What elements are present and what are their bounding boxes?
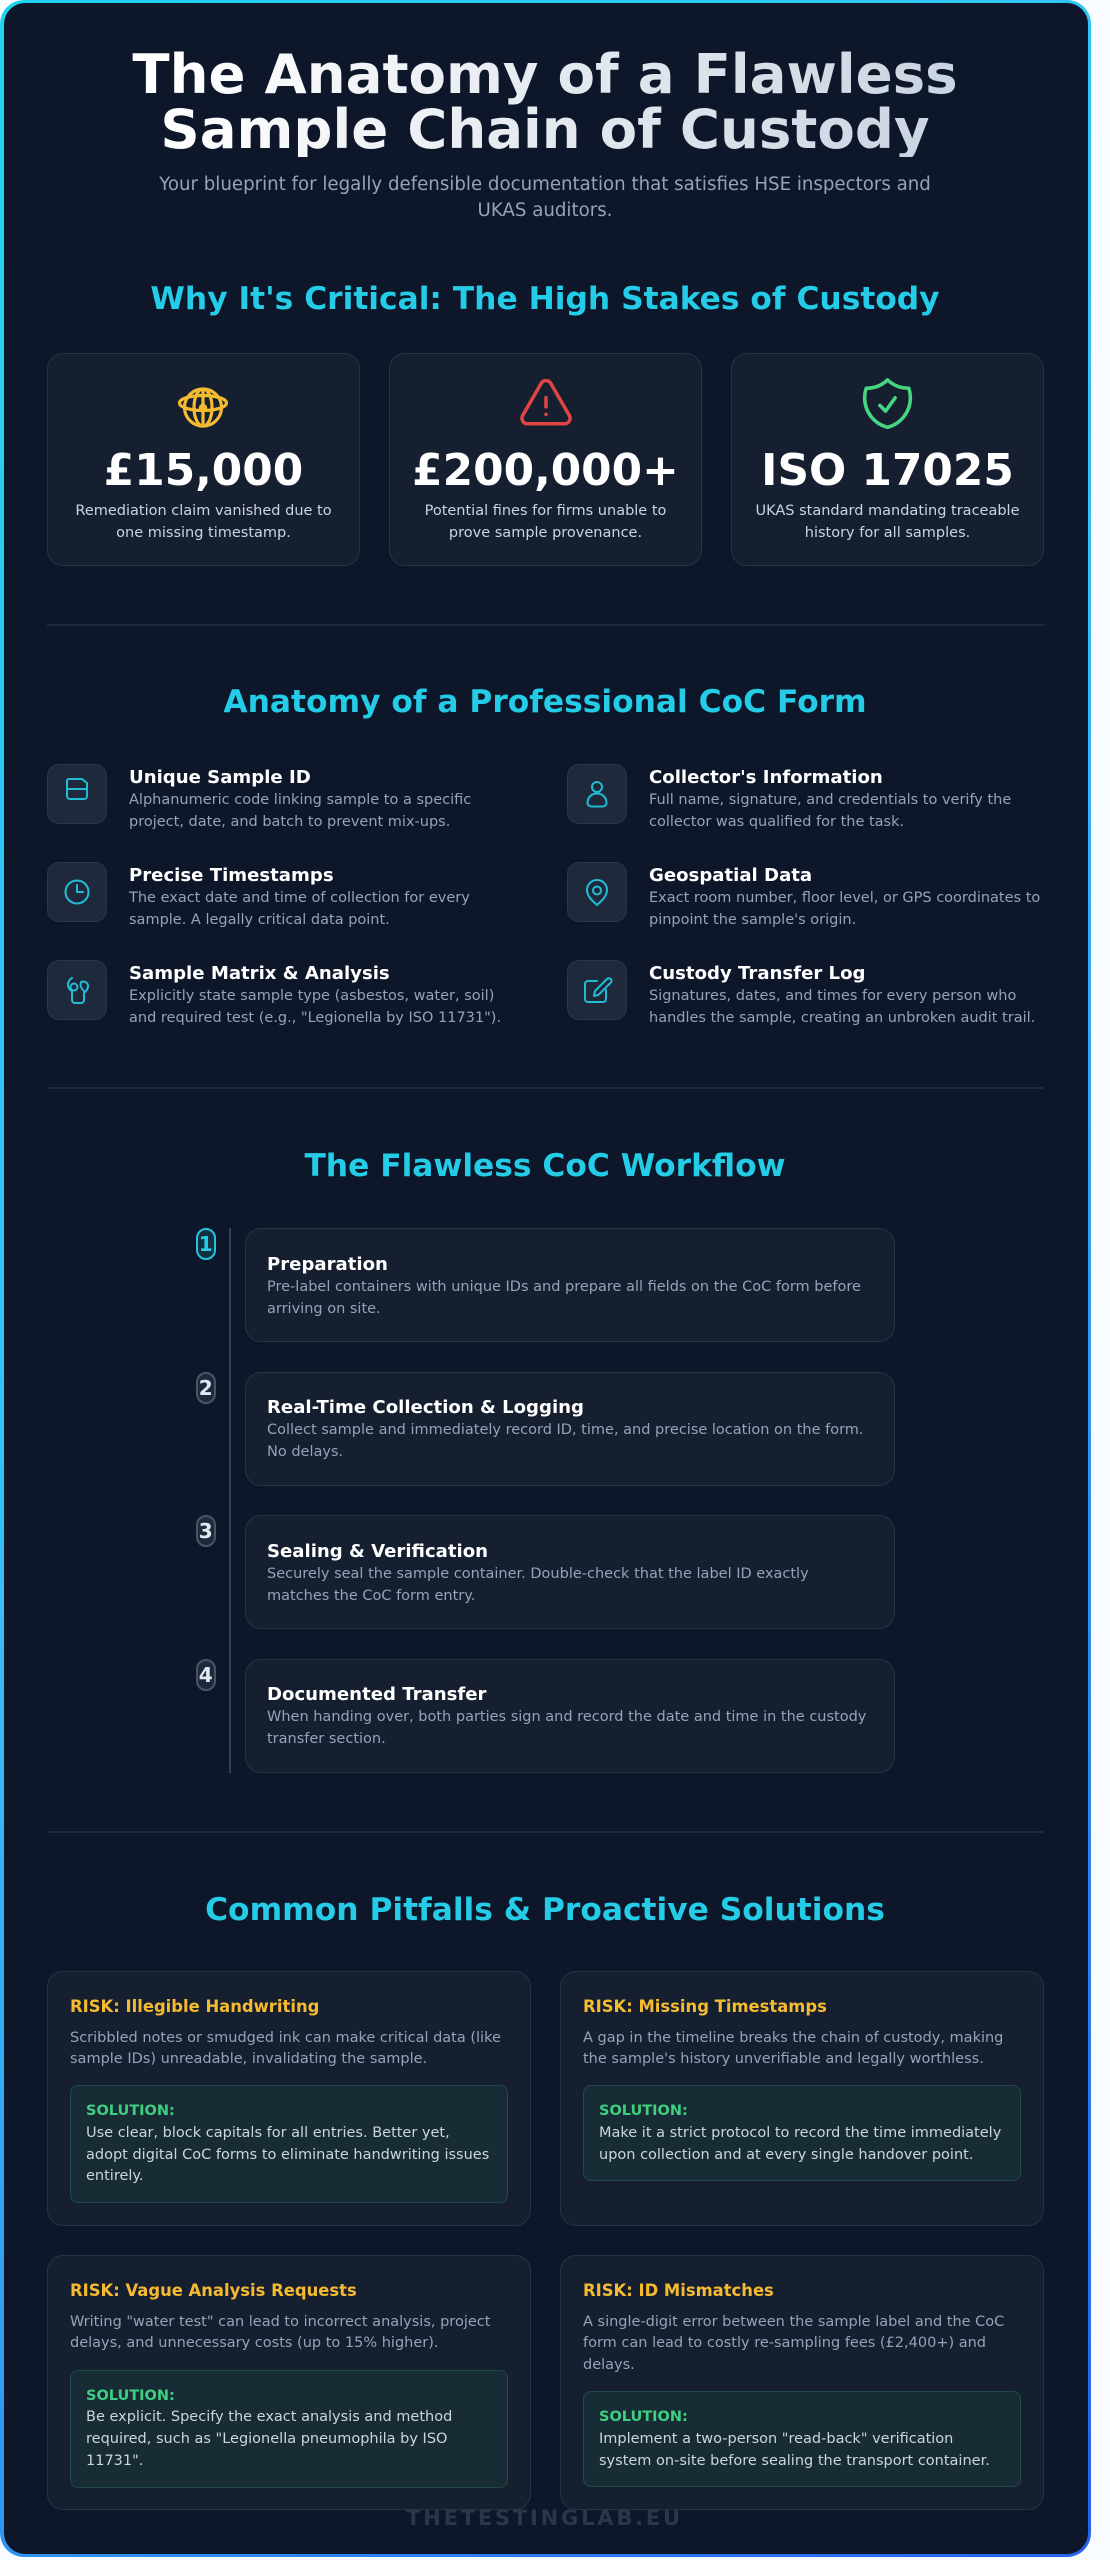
risk title: RISK: Vague Analysis Requests — [70, 2281, 357, 2300]
panel: ID mismatches — [560, 2255, 1044, 2510]
icon: pencil square — [567, 960, 627, 1020]
step description — [267, 1422, 864, 1460]
icon: map pin — [567, 862, 627, 922]
step description: transfer section. — [267, 1731, 386, 1747]
risk description — [583, 2314, 1004, 2373]
solution box — [70, 2085, 508, 2203]
risk title: RISK: ID Mismatches — [583, 2281, 774, 2300]
risk title: RISK: Illegible Handwriting — [70, 1997, 319, 2016]
feature title: Sample Matrix & Analysis — [129, 963, 390, 984]
title — [0, 47, 1090, 157]
feature description: Alphanumeric code linking sample to a specific — [129, 792, 471, 808]
stat description: Remediation claim vanished due to — [75, 502, 332, 518]
risk description: delays. — [583, 2357, 635, 2373]
step badge 3: 3 — [199, 1519, 213, 1543]
step badge 2 — [196, 1372, 216, 1404]
solution box — [583, 2391, 1021, 2487]
panel: missing timestamps — [560, 1971, 1044, 2226]
stat description: UKAS standard mandating traceable — [756, 502, 1020, 518]
risk description — [583, 2030, 1003, 2067]
step description — [267, 1279, 861, 1317]
icon: gold coin globe — [178, 387, 228, 428]
risk description: the sample's history unverifiable and legally worthless. — [583, 2051, 984, 2067]
workflow step 3 — [245, 1515, 895, 1629]
feature title: Geospatial Data — [649, 865, 812, 886]
subtitle — [159, 174, 931, 221]
solution box: 11731". — [86, 2453, 143, 2469]
step description — [267, 1709, 866, 1747]
watermark: THETESTINGLAB.EU — [406, 2506, 683, 2530]
feature description — [129, 792, 471, 830]
solution box — [583, 2085, 1021, 2181]
step description: Pre-label containers with unique IDs and prepare all fields on the CoC form before — [267, 1279, 861, 1295]
solution box: entirely. — [86, 2168, 144, 2184]
workflow step 2 — [245, 1372, 895, 1486]
feature: sample matrix — [47, 960, 501, 1026]
solution box: system on-site before sealing the transport container. — [599, 2453, 990, 2469]
feature description: Exact room number, floor level, or GPS coordinates to — [649, 890, 1040, 906]
step badge 3 — [196, 1515, 216, 1547]
step description: Securely seal the sample container. Double-check that the label ID exactly — [267, 1566, 809, 1582]
feature title: Unique Sample ID — [129, 767, 311, 788]
stat description: history for all samples. — [805, 525, 970, 541]
solution box: required, such as "Legionella pneumophila by ISO — [86, 2431, 447, 2447]
step title: Sealing & Verification — [267, 1540, 488, 1562]
icon: tag — [47, 764, 107, 824]
subtitle: UKAS auditors. — [478, 200, 612, 221]
feature description: handles the sample, creating an unbroken audit trail. — [649, 1010, 1035, 1026]
feature description: pinpoint the sample's origin. — [649, 912, 856, 928]
icon: person — [567, 764, 627, 824]
feature description: and required test (e.g., "Legionella by ISO 11731"). — [129, 1010, 501, 1026]
feature description: Full name, signature, and credentials to verify the — [649, 792, 1011, 808]
panel: illegible handwriting — [47, 1971, 531, 2226]
step title: Preparation — [267, 1254, 388, 1274]
feature title: Custody Transfer Log — [649, 963, 865, 984]
feature description: sample. A legally critical data point. — [129, 912, 390, 928]
panel: stat £200,000+ — [389, 353, 702, 566]
workflow step 1 — [245, 1228, 895, 1342]
risk description: form can lead to costly re-sampling fees (£2,400+) and — [583, 2335, 986, 2351]
step description: When handing over, both parties sign and record the date and time in the custody — [267, 1709, 866, 1725]
icon: shield check — [862, 378, 912, 430]
panel: stat ISO 17025 — [731, 353, 1044, 566]
heading: pitfalls: Common Pitfalls & Proactive Solutions — [205, 1892, 885, 1928]
step badge 1 — [196, 1228, 216, 1260]
stat description: Potential fines for firms unable to — [425, 502, 666, 518]
stat number: £15,000 — [104, 445, 303, 496]
stat description — [756, 502, 1020, 541]
solution box: Implement a two-person "read-back" verification — [599, 2431, 953, 2447]
step description: Collect sample and immediately record ID, time, and precise location on the form. — [267, 1422, 864, 1438]
risk description: delays, and unnecessary costs (up to 15% higher). — [70, 2335, 438, 2351]
feature description — [649, 890, 1040, 928]
solution box: Be explicit. Specify the exact analysis and method — [86, 2409, 452, 2425]
stat number: ISO 17025 — [761, 445, 1014, 496]
risk description — [70, 2030, 501, 2067]
panel: stat £15,000 — [47, 353, 360, 566]
solution box: SOLUTION: — [86, 2388, 175, 2404]
heading: why it's critical: Why It's Critical: The High Stakes of Custody — [150, 280, 940, 316]
title: Sample Chain of Custody — [160, 97, 930, 161]
feature: geospatial data — [567, 862, 1040, 928]
feature: unique sample ID — [47, 764, 471, 830]
step title: Real-Time Collection & Logging — [267, 1397, 584, 1418]
risk description: Scribbled notes or smudged ink can make critical data (like — [70, 2030, 501, 2046]
risk description: A single-digit error between the sample label and the CoC — [583, 2314, 1004, 2330]
heading: anatomy of a form: Anatomy of a Professional CoC Form — [223, 684, 867, 720]
stat description — [425, 502, 666, 541]
icon: warning triangle — [520, 378, 572, 426]
feature description: Signatures, dates, and times for every person who — [649, 988, 1016, 1004]
solution box: SOLUTION: — [599, 2103, 688, 2119]
feature description — [129, 988, 501, 1026]
feature: custody transfer log — [567, 960, 1035, 1026]
step badge 2: 2 — [199, 1376, 213, 1400]
heading: workflow: The Flawless CoC Workflow — [304, 1148, 786, 1184]
solution box: SOLUTION: — [86, 2103, 175, 2119]
feature description: Explicitly state sample type (asbestos, water, soil) — [129, 988, 494, 1004]
risk description: A gap in the timeline breaks the chain of custody, making — [583, 2030, 1003, 2046]
feature description — [128, 890, 470, 928]
risk description: sample IDs) unreadable, invalidating the sample. — [70, 2051, 427, 2067]
title: The Anatomy of a Flawless — [132, 42, 958, 106]
stat description: one missing timestamp. — [116, 525, 291, 541]
feature description — [649, 792, 1011, 830]
solution box: adopt digital CoC forms to eliminate handwriting issues — [86, 2147, 489, 2163]
solution box: Use clear, block capitals for all entries. Better yet, — [86, 2125, 450, 2141]
subtitle: Your blueprint for legally defensible documentation that satisfies HSE inspectors and — [159, 174, 931, 195]
feature description: The exact date and time of collection for every — [129, 890, 470, 906]
step badge 4: 4 — [199, 1662, 213, 1686]
icon: beakers — [47, 960, 107, 1020]
feature description: project, date, and batch to prevent mix-ups. — [129, 814, 450, 830]
feature description: collector was qualified for the task. — [649, 814, 904, 830]
feature description — [649, 988, 1035, 1026]
step description: arriving on site. — [267, 1301, 381, 1317]
solution box: Make it a strict protocol to record the time immediately — [599, 2125, 1001, 2141]
step badge 1: 1 — [199, 1232, 213, 1256]
step badge 4 — [196, 1658, 216, 1690]
icon: clock — [47, 862, 107, 922]
risk description: Writing "water test" can lead to incorrect analysis, project — [70, 2314, 490, 2330]
stat description: prove sample provenance. — [449, 525, 642, 541]
solution box — [70, 2370, 508, 2488]
solution box: SOLUTION: — [599, 2409, 688, 2425]
feature: precise timestamps — [47, 862, 470, 928]
step description — [267, 1566, 809, 1604]
step title: Documented Transfer — [267, 1684, 486, 1705]
step description: matches the CoC form entry. — [267, 1588, 475, 1604]
risk title: RISK: Missing Timestamps — [583, 1997, 827, 2016]
panel: vague analysis requests — [47, 2255, 531, 2510]
stat description — [75, 502, 332, 541]
risk description — [70, 2314, 490, 2351]
workflow step 4 — [245, 1658, 895, 1772]
feature title: Precise Timestamps — [129, 865, 334, 886]
feature: collector's information — [567, 764, 1011, 830]
solution box: upon collection and at every single handover point. — [599, 2147, 973, 2163]
feature title: Collector's Information — [649, 767, 883, 788]
stat number: £200,000+ — [412, 445, 679, 496]
step description: No delays. — [267, 1444, 343, 1460]
